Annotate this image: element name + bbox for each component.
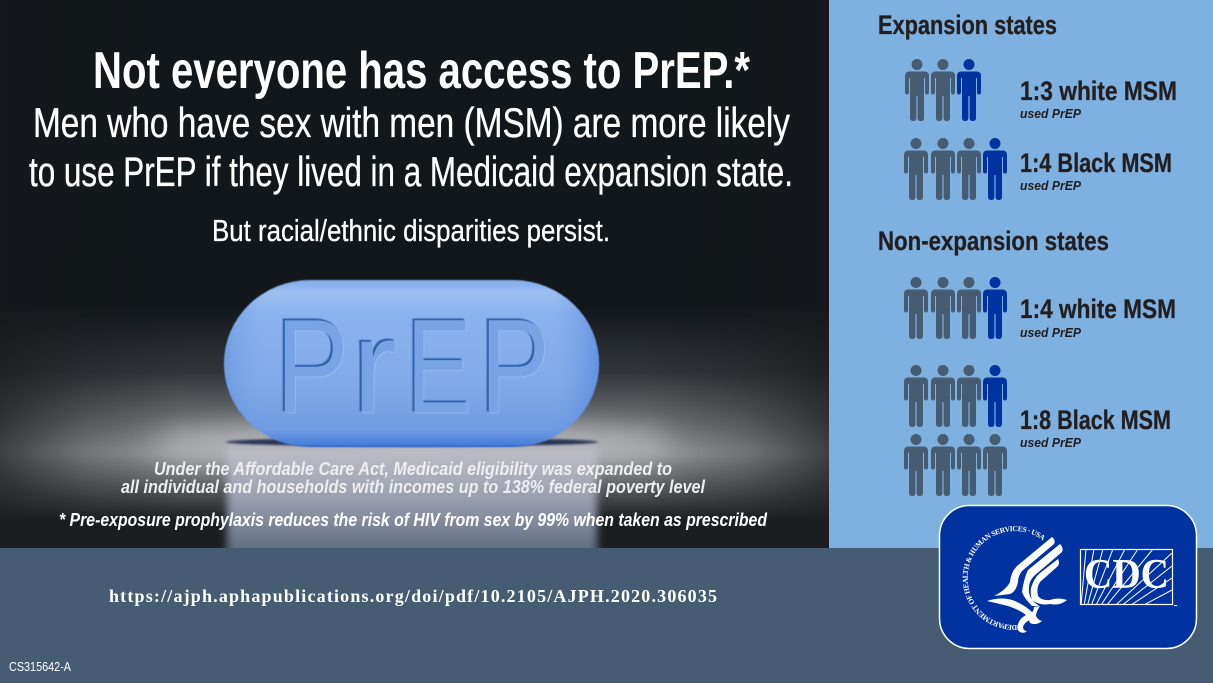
engraved pill lettering: shadow: P (478, 290, 548, 440)
engraved pill lettering: face: P (480, 292, 550, 442)
stat: 1:4 white MSM: used PrEP (1020, 325, 1081, 340)
engraved pill lettering: shadow: r (351, 291, 395, 440)
engraved pill lettering: highlight: E (407, 292, 472, 442)
engraved pill lettering: face: E (406, 291, 471, 441)
icon: HHS seal: DEPARTMENT OF HEALTH & HUMAN SERVICES · USA (962, 526, 1044, 630)
engraved pill lettering: face (284, 320, 544, 412)
stat: 1:8 Black MSM: 1:8 Black MSM (1020, 405, 1171, 435)
photo panel: dark background with lit table (0, 0, 829, 558)
icon row: 1 of 4 (904, 138, 1007, 200)
stat: 1:3 white MSM: used PrEP (1020, 106, 1081, 121)
document code: CS315642-A (9, 659, 71, 674)
source URL: https://ajph.aphapublications.org/doi/pdf/10.2105/AJPH.2020.306035 (109, 586, 717, 606)
engraved pill lettering: highlight (285, 321, 545, 414)
ACA footnote: Under the Affordable Care Act, Medicaid eligibility was expanded to (154, 459, 672, 479)
engraved pill lettering: highlight: r (353, 293, 397, 442)
logo panel (938, 504, 1198, 650)
heading: expansion states: Expansion states (878, 10, 1057, 40)
engraved pill lettering: face: P (276, 291, 349, 441)
ACA footnote: all individual and households with incomes up to 138% federal poverty level (121, 477, 706, 497)
stat: 1:4 white MSM: 1:4 white MSM (1020, 294, 1176, 324)
stat: 1:3 white MSM: 1:3 white MSM (1020, 76, 1177, 106)
engraved pill lettering: highlight: P (276, 291, 349, 441)
subheading (29, 99, 793, 195)
engraved pill lettering: face: r (352, 292, 397, 442)
right panel background (829, 0, 1213, 548)
bottom band (0, 548, 1213, 683)
engraved pill lettering: highlight: P (481, 292, 550, 442)
PrEP footnote: * Pre-exposure prophylaxis reduces the risk of HIV from sex by 99% when taken as prescribed (59, 510, 768, 530)
subheading: Men who have sex with men (MSM) are more likely (33, 99, 790, 146)
stat: 1:4 white MSM (1020, 294, 1176, 340)
icon row: 1 of 4 (904, 277, 1007, 339)
stat: 1:3 white MSM (1020, 76, 1177, 121)
icon row: 1 of 3 (905, 59, 981, 121)
engraved pill lettering: shadow: E (405, 290, 470, 440)
heading: non-expansion states: Non-expansion states (878, 226, 1109, 256)
main headline: Not everyone has access to PrEP.* (93, 42, 751, 100)
stat: 1:4 Black MSM (1020, 148, 1172, 193)
icon: CDC logo: CDC (1084, 552, 1169, 598)
disparities statement: But racial/ethnic disparities persist. (212, 213, 610, 248)
engraved pill lettering: shadow (282, 318, 540, 412)
pill shadow (226, 438, 598, 446)
stat: 1:8 Black MSM (1020, 405, 1171, 450)
stat: 1:4 Black MSM: 1:4 Black MSM (1020, 148, 1172, 178)
stat: 1:8 Black MSM: used PrEP (1020, 435, 1081, 450)
icon rows: 1 of 8 (904, 365, 1007, 496)
stat: 1:4 Black MSM: used PrEP (1020, 178, 1081, 193)
subheading: to use PrEP if they lived in a Medicaid expansion state. (29, 148, 793, 195)
pill (224, 280, 599, 447)
engraved pill lettering: shadow: P (274, 289, 347, 439)
ACA footnote (121, 459, 706, 497)
